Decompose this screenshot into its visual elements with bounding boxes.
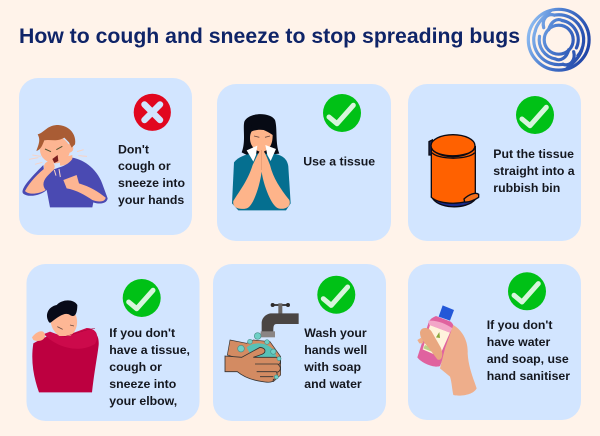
illustration: man coughing into hand	[23, 125, 108, 207]
illustration: person sneezing into elbow	[32, 300, 99, 392]
text: wash hands: and water	[304, 377, 362, 391]
text: rubbish bin: Put the tissue	[493, 147, 574, 161]
panel: rubbish bin	[408, 84, 581, 241]
text: wash hands: hands well	[304, 343, 367, 357]
illustration: woman with tissue	[232, 114, 291, 210]
text: hand sanitiser: and soap, use	[487, 352, 569, 366]
icon: green check	[508, 272, 546, 310]
text: cough into elbow: sneeze into	[109, 377, 177, 391]
panel: cough into elbow	[26, 264, 200, 421]
text: do not cough: Don't	[118, 142, 149, 156]
title: How to cough and sneeze to stop spreading bugs	[19, 25, 520, 48]
icon: green check	[516, 96, 554, 134]
logo	[528, 9, 589, 70]
icon: green check	[123, 279, 161, 317]
text: hand sanitiser: If you don't	[487, 318, 552, 332]
text: wash hands: with soap	[303, 360, 361, 374]
icon: green check	[317, 276, 355, 314]
text: use a tissue: Use a tissue	[303, 154, 375, 168]
text: rubbish bin: rubbish bin	[493, 181, 560, 195]
illustration: hand holding sanitiser bottle	[417, 305, 477, 396]
panel: do not cough into hands	[19, 78, 192, 235]
text: hand sanitiser: have water	[487, 335, 550, 349]
text: do not cough: your hands	[118, 193, 184, 207]
panel: hand sanitiser	[408, 264, 581, 420]
panel: use a tissue	[217, 84, 391, 241]
text: do not cough: cough or	[118, 159, 171, 173]
text: cough into elbow: If you don't	[109, 326, 175, 340]
illustration: orange pedal bin	[429, 135, 479, 207]
icon: red cross	[134, 94, 171, 131]
text: cough into elbow: cough or	[109, 360, 162, 374]
text: hand sanitiser: hand sanitiser	[487, 369, 570, 383]
text: cough into elbow: your elbow,	[109, 394, 177, 408]
panel: wash hands	[213, 264, 386, 421]
text: rubbish bin: straight into a	[493, 164, 575, 178]
text: do not cough: sneeze into	[118, 176, 185, 190]
text: cough into elbow: have a tissue,	[109, 343, 190, 357]
icon: green check	[323, 94, 361, 132]
illustration: hands washing under tap	[225, 303, 299, 382]
text: wash hands: Wash your	[304, 326, 367, 340]
